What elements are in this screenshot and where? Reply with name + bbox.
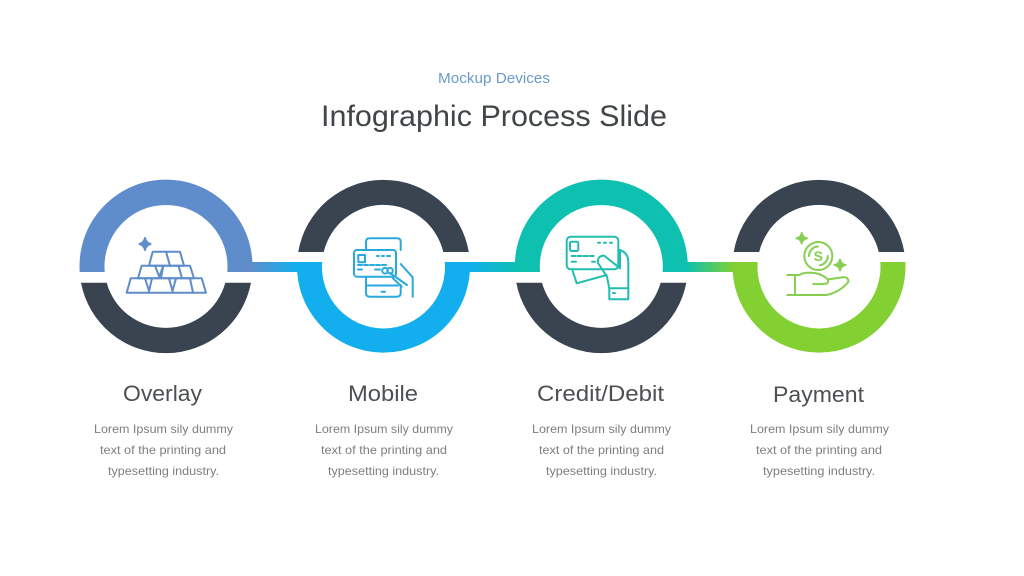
panel: overlay (80, 180, 253, 478)
description: payment (750, 422, 889, 478)
description: mobile (315, 422, 453, 478)
subtitle: Mockup Devices (438, 70, 550, 87)
label: mobile: Mobile (348, 381, 418, 406)
label: payment: Payment (773, 382, 864, 407)
description: credit/debit: Lorem Ipsum sily dummy (532, 422, 671, 436)
label: overlay: Overlay (123, 381, 202, 406)
description: overlay: typesetting industry. (108, 464, 219, 478)
description: credit/debit: typesetting industry. (546, 464, 657, 478)
description: credit/debit (532, 422, 671, 478)
description: mobile: Lorem Ipsum sily dummy (315, 422, 453, 436)
ring: payment (732, 180, 906, 353)
description: overlay (94, 422, 233, 478)
description: overlay: Lorem Ipsum sily dummy (94, 422, 233, 436)
description: overlay: text of the printing and (100, 443, 226, 457)
icon: hand with coin: S (814, 248, 823, 264)
ring: credit/debit (515, 180, 688, 353)
panel: mobile (297, 180, 470, 478)
panel: credit/debit (515, 180, 688, 478)
connector: overlay to mobile (245, 262, 305, 272)
icon: gold bars (127, 238, 206, 293)
description: payment: Lorem Ipsum sily dummy (750, 422, 889, 436)
description: mobile: text of the printing and (321, 443, 447, 457)
ring: overlay (80, 180, 253, 353)
panel: payment (732, 180, 906, 478)
description: payment: text of the printing and (756, 443, 882, 457)
connector: mobile to credit/debit (463, 262, 523, 272)
icon: hand with coin (787, 233, 848, 295)
description: payment: typesetting industry. (763, 464, 875, 478)
icon: phone and card (354, 238, 413, 297)
icon: hand holding card (567, 237, 628, 299)
ring: mobile (297, 180, 470, 353)
label: credit/debit: Credit/Debit (537, 381, 664, 406)
title: Infographic Process Slide (321, 100, 667, 133)
description: mobile: typesetting industry. (328, 464, 439, 478)
description: credit/debit: text of the printing and (539, 443, 664, 457)
connector: credit/debit to payment (681, 262, 741, 272)
